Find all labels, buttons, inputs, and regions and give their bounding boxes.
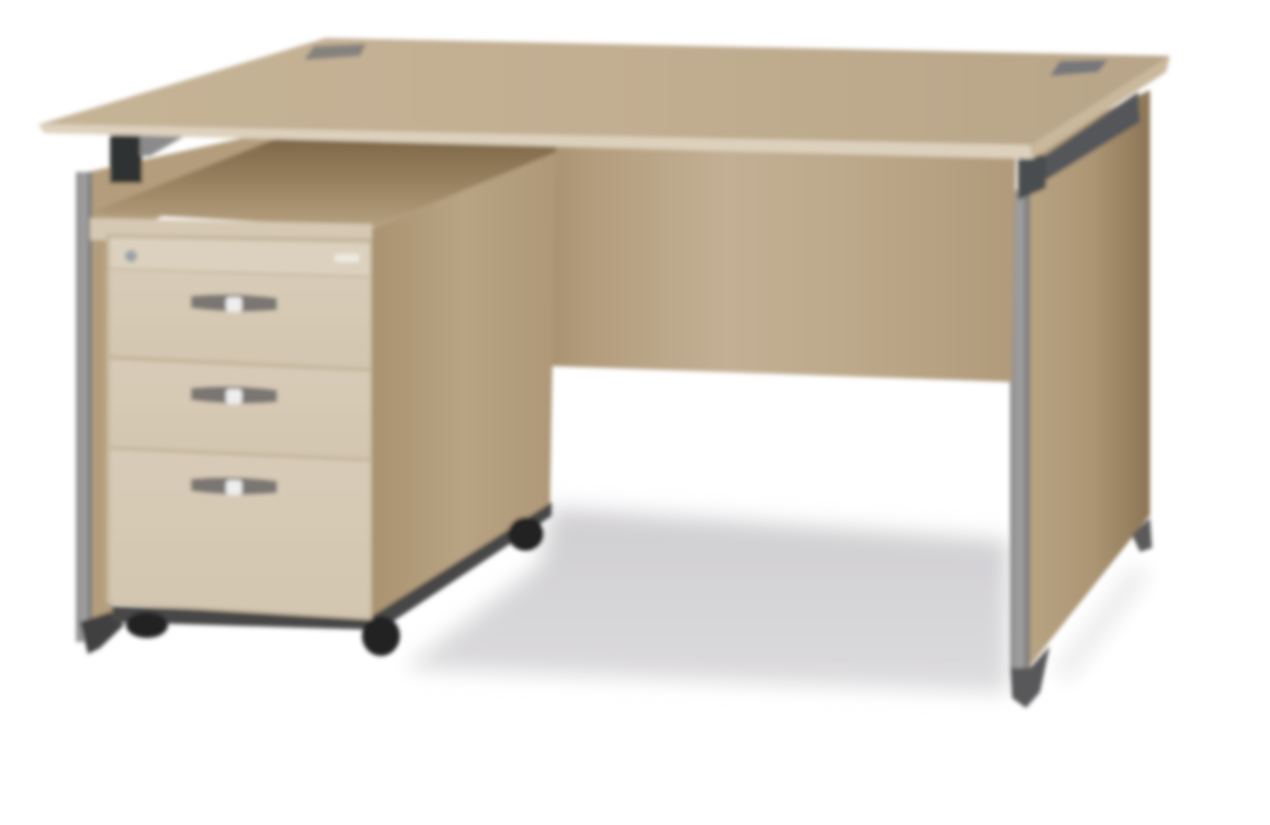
drawer 1 bbox=[110, 270, 370, 368]
pedestal front backing bbox=[106, 234, 372, 620]
pedestal front top rim bbox=[90, 218, 372, 246]
floor shadow bbox=[405, 508, 1148, 692]
drawer 2 bbox=[110, 360, 370, 458]
top drawer strip bbox=[110, 238, 370, 276]
cable grommet right bbox=[1050, 60, 1108, 76]
pedestal hollow top bbox=[92, 135, 556, 228]
drawer 3 bbox=[110, 450, 370, 618]
left side panel and leg bbox=[76, 130, 300, 654]
desktop right edge bbox=[1030, 56, 1170, 159]
cable grommet left bbox=[304, 44, 366, 60]
pedestal bbox=[90, 135, 556, 656]
right metal leg bbox=[1010, 155, 1050, 708]
pedestal side bbox=[368, 152, 556, 622]
pedestal base shadow bbox=[112, 502, 552, 630]
modesty panel bbox=[550, 145, 1016, 382]
right side panel bbox=[1025, 90, 1152, 672]
desktop surface bbox=[40, 38, 1170, 146]
desktop bbox=[38, 38, 1170, 159]
desktop front edge bbox=[38, 124, 1032, 159]
casters bbox=[126, 517, 544, 656]
